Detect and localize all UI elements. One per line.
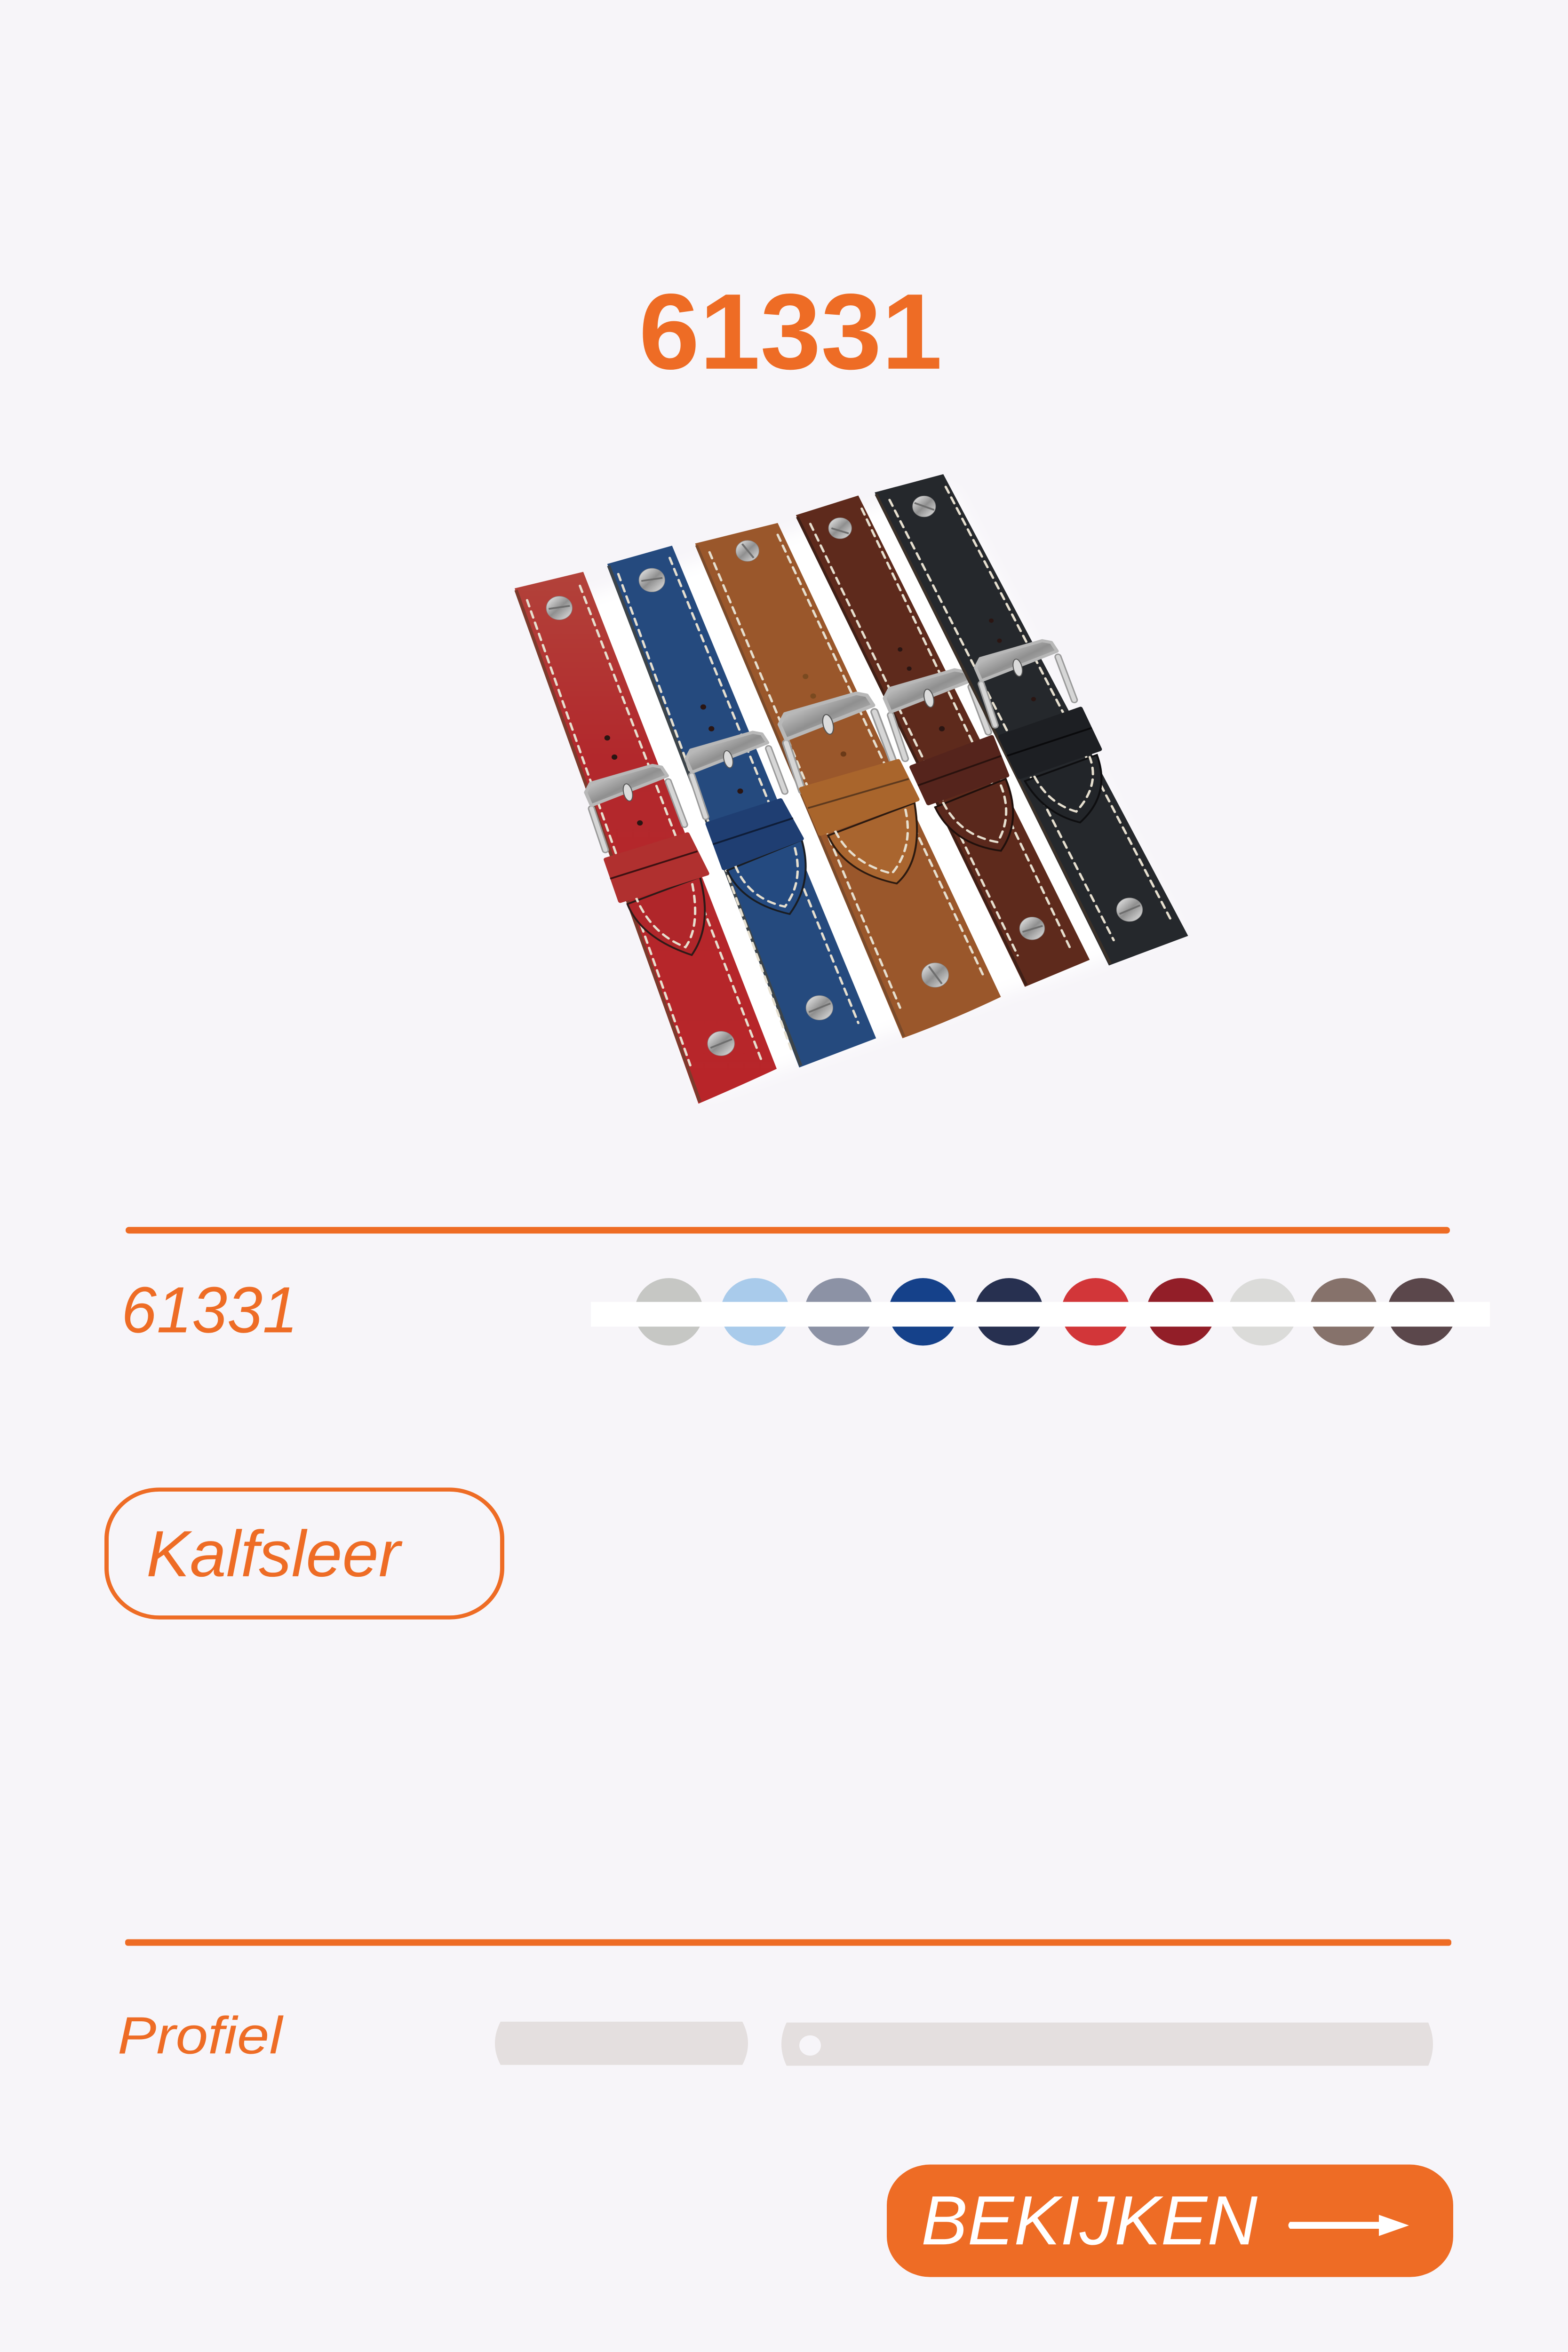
profile diagram xyxy=(495,2022,1433,2066)
model number: 61331 xyxy=(121,1274,298,1346)
product photo: five leather watch straps xyxy=(515,474,1188,1104)
material tag xyxy=(106,1490,502,1617)
colour swatches xyxy=(591,1278,1490,1345)
divider: top xyxy=(126,1227,1450,1233)
strap: red xyxy=(515,572,777,1104)
strap: black xyxy=(875,474,1188,965)
material tag: Kalfsleer xyxy=(146,1518,403,1590)
strap: blue xyxy=(607,546,876,1067)
strap: tan brown xyxy=(695,523,1001,1038)
divider: bottom xyxy=(125,1939,1451,1946)
icon: arrow xyxy=(1288,2215,1409,2236)
strap: dark brown xyxy=(796,495,1090,987)
title: 61331 xyxy=(639,272,942,392)
profile label: Profiel xyxy=(118,2007,284,2065)
button: BEKIJKEN xyxy=(921,2182,1258,2259)
button xyxy=(887,2165,1453,2277)
